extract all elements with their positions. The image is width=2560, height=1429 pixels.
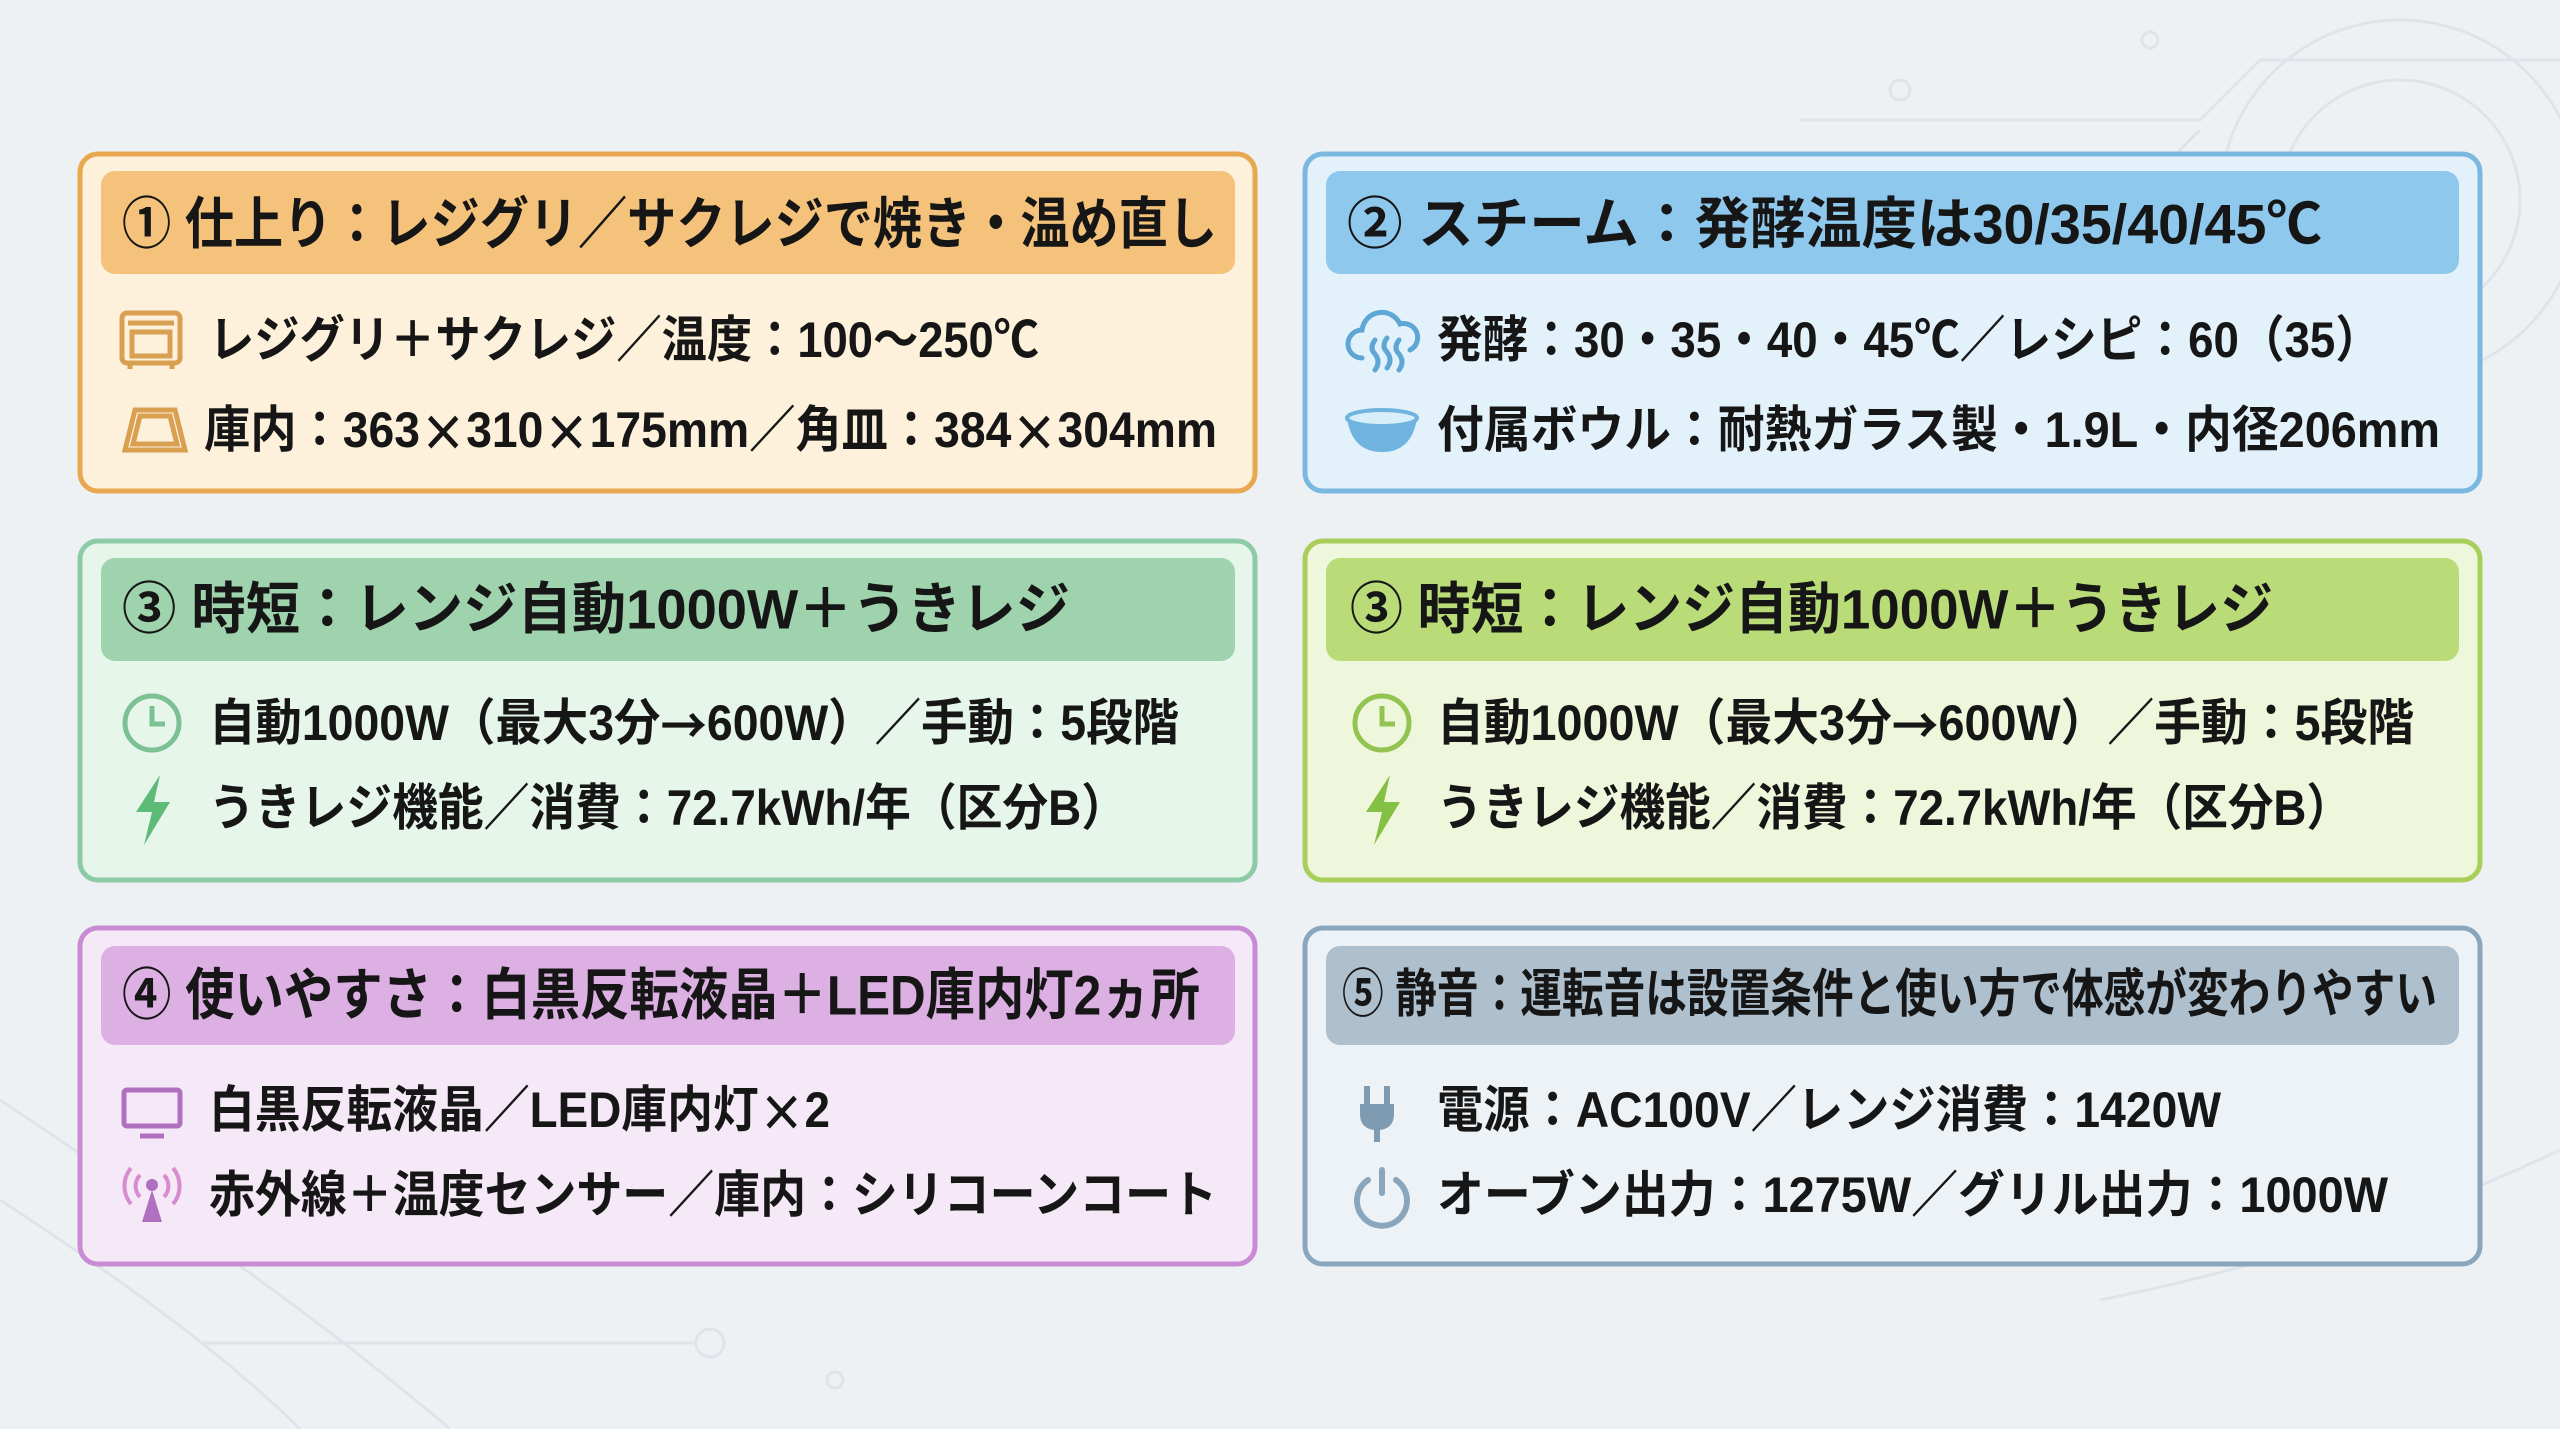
icon: clock xyxy=(1355,696,1409,750)
heading: 2 xyxy=(1326,171,2459,274)
panel: 1 finishing xyxy=(80,154,1255,491)
icon: monitor xyxy=(124,1090,180,1136)
panel: 5 quiet xyxy=(1305,928,2480,1264)
heading: 2: ② スチーム：発酵温度は30/35/40/45℃ xyxy=(1347,192,2322,256)
text: line 1: 電源：AC100V／レンジ消費：1420W xyxy=(1437,1082,2222,1138)
text: line 2: 付属ボウル：耐熱ガラス製・1.9L・内径206mm xyxy=(1437,402,2440,458)
panel: 2 steam xyxy=(1305,154,2480,491)
icon: oven xyxy=(122,313,180,369)
heading: 3: ③ 時短：レンジ自動1000W＋うきレジ xyxy=(122,578,1070,640)
icon: clock xyxy=(125,696,179,750)
heading: 1: ① 仕上り：レジグリ／サクレジで焼き・温め直し xyxy=(122,192,1217,256)
icon: steam cloud xyxy=(1348,312,1418,370)
text: line 2: オーブン出力：1275W／グリル出力：1000W xyxy=(1437,1167,2389,1223)
heading: 4: ④ 使いやすさ：白黒反転液晶＋LED庫内灯2ヵ所 xyxy=(122,964,1200,1026)
heading: 3 xyxy=(101,558,1235,661)
heading: 3b: ③ 時短：レンジ自動1000W＋うきレジ xyxy=(1350,578,2273,640)
text: line 2: うきレジ機能／消費：72.7kWh/年（区分B） xyxy=(1437,780,2352,836)
icon: sensor xyxy=(124,1168,180,1222)
text: line 2: 庫内：363×310×175mm／角皿：384×304mm xyxy=(204,394,1217,466)
text: line 1: 発酵：30・35・40・45℃／レシピ：60（35） xyxy=(1437,312,2381,368)
text: line 1: レジグリ＋サクレジ／温度：100〜250℃ xyxy=(209,312,1039,368)
heading: 3b xyxy=(1326,558,2459,661)
icon: bolt xyxy=(136,775,170,845)
panel: 3 time saving (green) xyxy=(80,541,1255,880)
panel: 3 time saving (lime) xyxy=(1305,541,2480,880)
text: line 1: 自動1000W（最大3分→600W）／手動：5段階 xyxy=(209,687,1179,759)
heading: 1 xyxy=(101,171,1235,274)
icon: power xyxy=(1357,1170,1407,1226)
icon: bowl xyxy=(1347,410,1417,452)
text: line 1: 自動1000W（最大3分→600W）／手動：5段階 xyxy=(1437,687,2414,759)
text: line 2: 赤外線＋温度センサー／庫内：シリコーンコート xyxy=(209,1167,1217,1223)
panel: 4 usability xyxy=(80,928,1255,1264)
text: line 1: 白黒反転液晶／LED庫内灯×2 xyxy=(209,1074,830,1146)
icon: plug xyxy=(1360,1086,1394,1142)
heading: 5 xyxy=(1326,946,2459,1045)
heading: 4 xyxy=(101,946,1235,1045)
icon: bolt xyxy=(1366,775,1400,845)
icon: tray xyxy=(125,410,185,450)
text: line 2: うきレジ機能／消費：72.7kWh/年（区分B） xyxy=(209,780,1127,836)
